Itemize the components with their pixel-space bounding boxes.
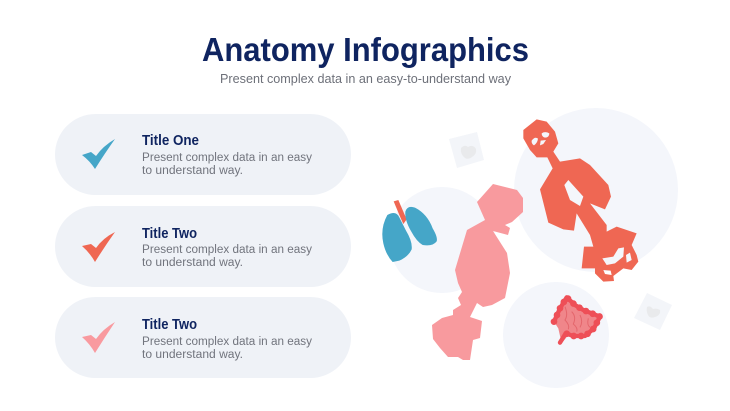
icon: pink anatomy figure (432, 184, 523, 360)
heading: title three: Title Two (142, 317, 197, 333)
heading: title two: Title Two (142, 226, 197, 242)
heading: title one: Title One (142, 133, 199, 149)
text: item one description: Present complex data in an easy (142, 152, 312, 164)
right lung (405, 207, 437, 245)
text: item two description: to understand way. (142, 257, 243, 269)
subtitle: Present complex data in an easy-to-understand way (220, 71, 511, 86)
title: Anatomy Infographics (202, 31, 529, 68)
icon: intestine (554, 297, 600, 343)
text: item three description: Present complex data in an easy (142, 336, 312, 348)
left lung (382, 213, 412, 262)
text: item three description (142, 336, 312, 361)
background circle: bottom (503, 282, 609, 388)
icon: red check (82, 232, 115, 262)
text: item two description (142, 244, 312, 269)
icon: heart card bottom (634, 293, 672, 330)
icon: blue check (82, 139, 115, 169)
background circle: left (389, 187, 495, 293)
panel: item one (55, 114, 351, 195)
background circle: large (514, 108, 678, 272)
icon: red anatomy figure (523, 119, 638, 282)
panel: item two (55, 206, 351, 287)
text: item two description: Present complex data in an easy (142, 244, 312, 256)
text: item one description: to understand way. (142, 165, 243, 177)
icon: heart card top (449, 132, 484, 168)
text: item one description (142, 152, 312, 177)
icon: pink check (82, 322, 115, 353)
text: item three description: to understand way. (142, 349, 243, 361)
icon: lungs (382, 200, 437, 262)
panel: item three (55, 297, 351, 378)
trachea (394, 200, 407, 224)
